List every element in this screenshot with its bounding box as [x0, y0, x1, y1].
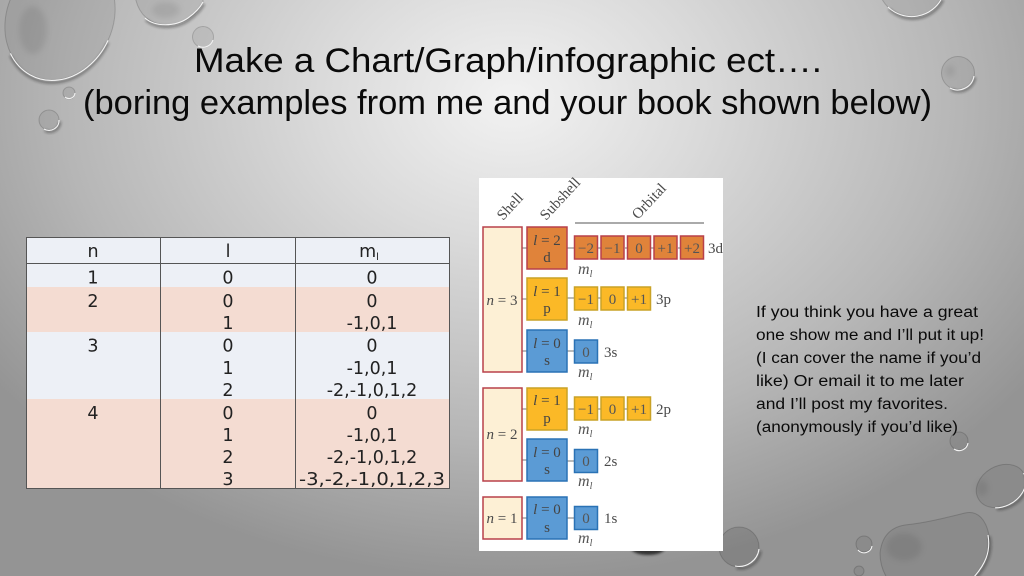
orbital 2s: m [578, 473, 590, 490]
side note text: (anonymously if you’d like) [756, 419, 958, 436]
table rows: 0 [366, 268, 378, 288]
orbital 1s: 0 [582, 511, 590, 527]
table rows: 3 [222, 470, 234, 490]
orbital 1s: 1s [604, 511, 618, 527]
side note text [756, 304, 984, 436]
table rows: 2 [222, 381, 234, 401]
orbitals 3d: −2 [578, 241, 594, 257]
table rows: -1,0,1 [347, 359, 397, 379]
subshell 3p: l = 1 [533, 284, 561, 300]
orbitals 3d: −1 [605, 241, 620, 257]
table rows: 3 [87, 336, 99, 356]
table rows: 0 [366, 336, 378, 356]
column headings: Subshell [537, 175, 584, 224]
orbitals 3p [574, 287, 671, 331]
orbitals 3p: +1 [631, 292, 647, 308]
table rows: -1,0,1 [347, 426, 397, 446]
table header [87, 242, 379, 263]
orbitals 2p: +1 [631, 402, 647, 418]
subshell 3d: l = 2 [533, 233, 561, 249]
orbitals 2p: m [578, 421, 590, 438]
table: quantum numbers n, l, ml [26, 237, 450, 490]
shell n=3: n = 3 [487, 293, 517, 309]
table rows: 1 [222, 314, 234, 334]
orbitals 3d: 0 [635, 241, 643, 257]
subshell 2s [527, 439, 567, 481]
side note text: If you think you have a great [756, 304, 979, 321]
column headings [494, 175, 704, 224]
subshell 1s [527, 497, 567, 539]
orbitals 3d: l [590, 269, 593, 280]
table rows: 0 [366, 292, 378, 312]
orbital 3s: m [578, 364, 590, 381]
title [83, 42, 932, 122]
orbitals 2p: 0 [609, 402, 616, 418]
subshell 2p: l = 1 [533, 393, 561, 409]
subshell 3d [527, 227, 567, 269]
orbitals 3d: +1 [658, 241, 673, 257]
table rows: 0 [222, 336, 234, 356]
orbital 3s: 0 [582, 345, 590, 361]
orbitals 3d: +2 [684, 241, 700, 257]
side note text: and I’ll post my favorites. [756, 396, 948, 413]
column headings: Orbital [629, 181, 670, 223]
orbitals 3p: l [590, 320, 593, 331]
column headings: Shell [494, 190, 527, 224]
subshell 1s: s [544, 520, 550, 536]
shell n=2 [483, 388, 522, 481]
side note text: like) Or email it to me later [756, 373, 964, 390]
subshell 2s: l = 0 [533, 445, 561, 461]
orbital 2s [574, 450, 618, 492]
subshell 3s [527, 330, 567, 372]
table rows: 2 [222, 448, 234, 468]
table header: l [376, 252, 379, 263]
subshell 1s: l = 0 [533, 502, 561, 518]
table rows: 0 [366, 404, 378, 424]
title: Make a Chart/Graph/infographic ect…. [194, 42, 822, 80]
subshell 2p: p [543, 411, 551, 427]
shell n=2: n = 2 [487, 427, 517, 443]
orbital 2s: 0 [582, 454, 590, 470]
subshell 3s: l = 0 [533, 336, 561, 352]
table header: l [226, 242, 230, 262]
table rows: 0 [222, 292, 234, 312]
table rows: -1,0,1 [347, 314, 397, 334]
shell n=1: n = 1 [487, 511, 517, 527]
table rows [87, 268, 445, 490]
subshell 2s: s [544, 462, 550, 478]
orbitals 2p [574, 397, 671, 440]
orbitals 2p: 2p [656, 402, 671, 418]
side note text: one show me and I’ll put it up! [756, 327, 984, 344]
table rows: 0 [222, 404, 234, 424]
orbitals 3d: 3d [708, 241, 724, 257]
orbital 3s: 3s [604, 345, 618, 361]
orbitals 2p: −1 [578, 402, 594, 418]
subshell 3d: d [543, 250, 551, 266]
table rows: -3,-2,-1,0,1,2,3 [299, 470, 445, 490]
orbital 1s: l [590, 538, 593, 549]
orbitals 3p: m [578, 312, 590, 329]
table header: m [359, 242, 376, 262]
table rows: 1 [222, 359, 234, 379]
table rows: 2 [87, 292, 99, 312]
table rows: -2,-1,0,1,2 [327, 448, 417, 468]
subshell 3s: s [544, 353, 550, 369]
subshell 3p [527, 278, 567, 320]
orbitals 3p: 3p [656, 292, 671, 308]
shell n=1 [483, 497, 522, 539]
orbitals 2p: l [590, 429, 593, 440]
shell n=3 [483, 227, 522, 372]
orbital diagram panel [479, 175, 724, 551]
title: (boring examples from me and your book shown below) [83, 84, 932, 122]
table rows: 0 [222, 268, 234, 288]
table rows: 1 [222, 426, 234, 446]
table rows: 1 [87, 268, 99, 288]
table rows: 4 [87, 404, 99, 424]
subshell 2p [527, 388, 567, 430]
orbitals 3p: −1 [578, 292, 594, 308]
side note text: (I can cover the name if you’d [756, 350, 981, 367]
connector lines [522, 248, 681, 518]
table header: n [87, 242, 99, 262]
table rows: -2,-1,0,1,2 [327, 381, 417, 401]
orbital 3s: l [590, 372, 593, 383]
orbitals 3d: m [578, 261, 590, 278]
orbital 2s: l [590, 481, 593, 492]
orbital 2s: 2s [604, 454, 618, 470]
orbital 1s: m [578, 530, 590, 547]
subshell 3p: p [543, 301, 551, 317]
orbital 1s [574, 506, 618, 549]
orbitals 3p: 0 [609, 292, 616, 308]
orbital 3s [574, 340, 618, 383]
orbitals 3d [574, 236, 724, 280]
